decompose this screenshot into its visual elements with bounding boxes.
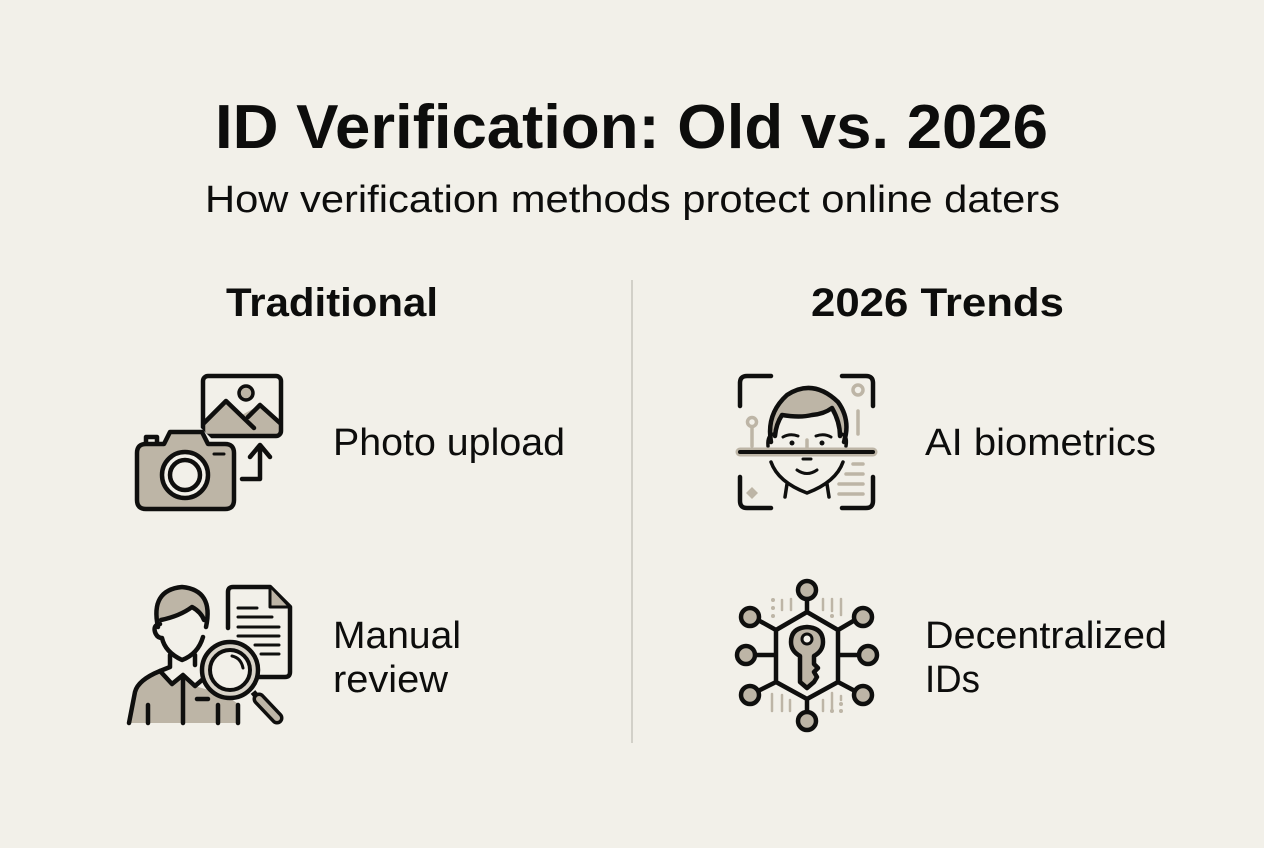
- column divider: [631, 280, 633, 743]
- panel: 2026 trends: [737, 281, 1167, 730]
- label: decentralized IDs: [925, 615, 1167, 701]
- icon: camera and photo upload: [137, 376, 281, 509]
- heading: 2026 trends: 2026 Trends: [811, 281, 1064, 325]
- label: manual review: review: [333, 659, 449, 701]
- label: decentralized IDs: IDs: [925, 659, 980, 701]
- label: photo upload: Photo upload: [333, 422, 565, 464]
- label: decentralized IDs: Decentralized: [925, 615, 1167, 657]
- title: ID Verification: Old vs. 2026: [215, 93, 1048, 162]
- icon: decentralized ID key network: [737, 581, 877, 730]
- label: AI biometrics: AI biometrics: [925, 422, 1156, 464]
- label: manual review: [333, 615, 461, 701]
- label: manual review: Manual: [333, 615, 461, 657]
- heading: traditional: Traditional: [226, 281, 438, 325]
- subtitle: How verification methods protect online daters: [205, 179, 1060, 221]
- icon: manual review person with document and magnifier: [129, 587, 290, 723]
- panel: traditional: [129, 281, 565, 723]
- icon: AI biometric face scan: [740, 376, 873, 508]
